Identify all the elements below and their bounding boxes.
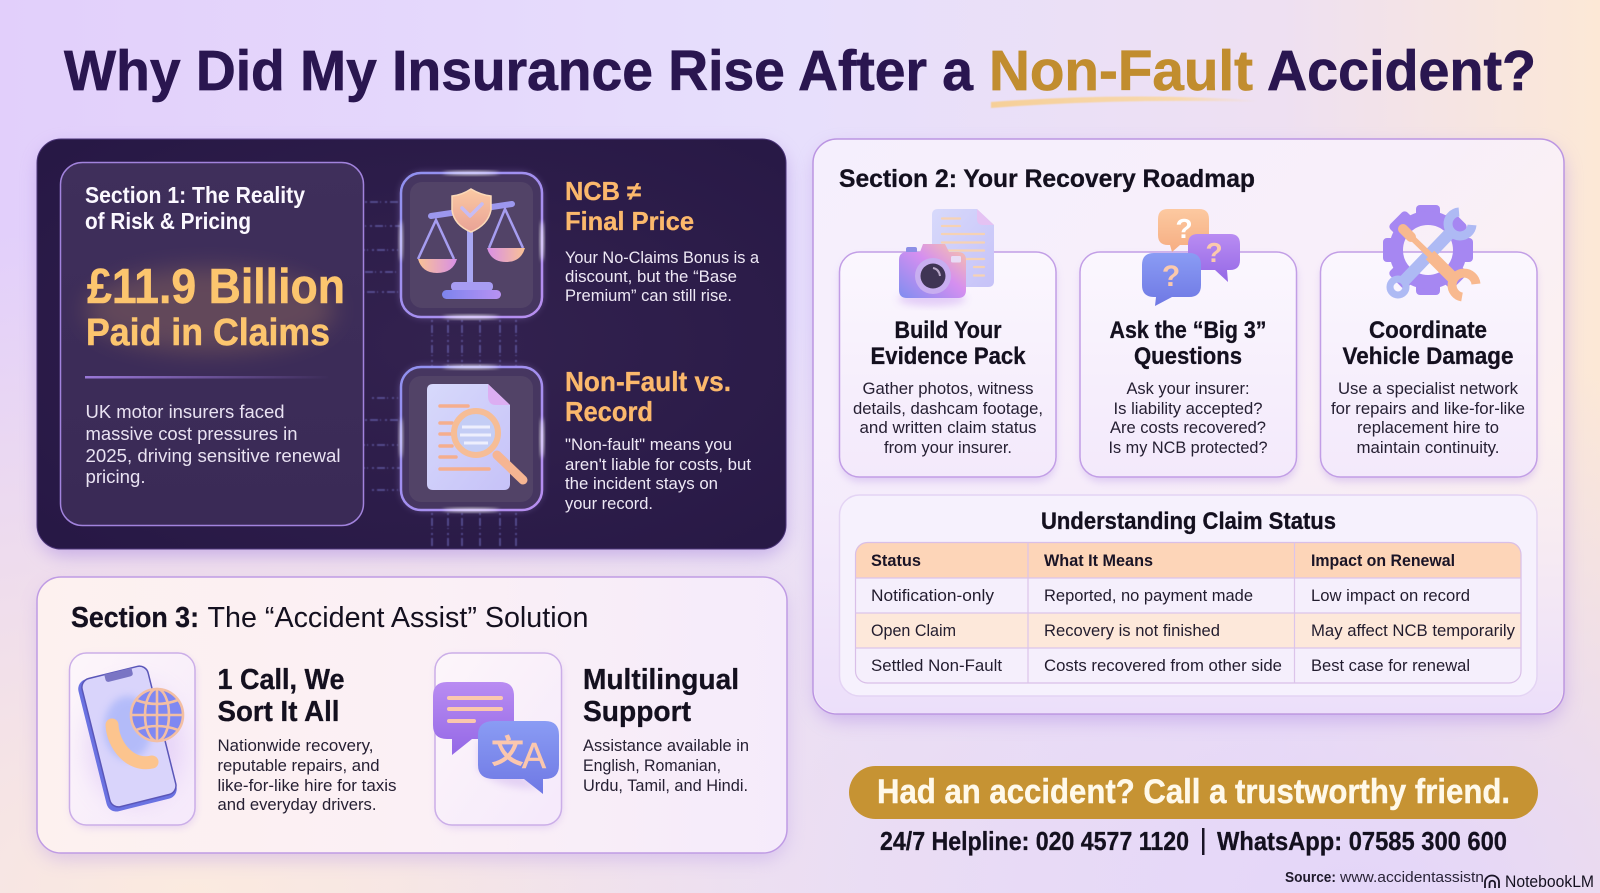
text: one call xyxy=(218,664,396,814)
text: non-fault vs record: Non-Fault vs. xyxy=(565,366,731,397)
text: one call: Nationwide recovery, xyxy=(218,736,374,755)
card text xyxy=(1331,317,1525,457)
row: open claim: Open Claim xyxy=(871,621,956,640)
text: NCB vs final price: Premium” can still rise. xyxy=(565,287,732,305)
table header: Status xyxy=(871,551,921,570)
contact line: 24/7 Helpline: 020 4577 1120 xyxy=(880,826,1189,856)
card text: from your insurer. xyxy=(884,438,1012,457)
data streaks xyxy=(330,202,516,548)
text: NCB vs final price: Your No-Claims Bonus is a xyxy=(565,249,760,267)
row: open claim: Recovery is not finished xyxy=(1044,621,1220,640)
text: multilingual support xyxy=(583,664,749,795)
text: non-fault vs record xyxy=(565,366,751,513)
icon: translation bubbles xyxy=(433,653,562,828)
row: notification-only: Reported, no payment made xyxy=(1044,586,1253,605)
title underline xyxy=(991,96,1258,108)
text: multilingual support: Assistance available in xyxy=(583,736,749,755)
stat description xyxy=(86,401,340,487)
source line xyxy=(1285,869,1484,886)
card text: details, dashcam footage, xyxy=(853,399,1043,418)
stat description: UK motor insurers faced xyxy=(86,401,284,422)
card text: Use a specialist network xyxy=(1338,379,1518,398)
text: one call: Sort It All xyxy=(218,696,340,728)
section 2 heading: Section 2: Your Recovery Roadmap xyxy=(839,165,1255,193)
row: notification-only xyxy=(871,586,1470,605)
card text: Is my NCB protected? xyxy=(1108,438,1268,457)
text: non-fault vs record: the incident stays on xyxy=(565,475,718,493)
card text: for repairs and like-for-like xyxy=(1331,399,1525,418)
row: notification-only: Notification-only xyxy=(871,586,994,605)
step card: evidence pack xyxy=(840,209,1056,482)
title: Accident? xyxy=(1267,39,1536,103)
icon: scales with shield xyxy=(399,171,544,319)
row: notification-only: Low impact on record xyxy=(1311,586,1470,605)
icon: question bubbles: ? xyxy=(1162,260,1180,293)
card text xyxy=(853,317,1043,457)
stat: Paid in Claims xyxy=(86,312,330,354)
text: one call: reputable repairs, and xyxy=(218,756,380,775)
table header xyxy=(871,551,1455,570)
card heading: Section 1: The Reality xyxy=(85,182,305,208)
card text xyxy=(1108,317,1268,457)
step card: vehicle damage xyxy=(1320,205,1537,482)
section 3 heading: Section 3: xyxy=(71,602,199,634)
row: settled non-fault: Costs recovered from other side xyxy=(1044,656,1282,675)
icon: translation bubbles: A xyxy=(522,735,546,776)
text: multilingual support: Multilingual xyxy=(583,664,739,696)
icon: question bubbles: ? xyxy=(1175,213,1193,244)
stat description: pricing. xyxy=(86,466,146,487)
card text: Coordinate xyxy=(1369,317,1487,344)
text: one call: like-for-like hire for taxis xyxy=(218,776,396,795)
card text: Evidence Pack xyxy=(870,343,1026,370)
table header: What It Means xyxy=(1044,551,1153,570)
stat description: massive cost pressures in xyxy=(86,423,298,444)
key stat card xyxy=(60,162,364,526)
text: one call: and everyday drivers. xyxy=(218,795,376,814)
call to action pill: Had an accident? Call a trustworthy friend. xyxy=(877,773,1510,811)
claim status card xyxy=(840,495,1537,696)
panel: section 3 xyxy=(37,577,787,860)
card heading xyxy=(85,182,305,234)
stat: £11.9 Billion xyxy=(87,260,345,314)
contact line xyxy=(880,826,1507,856)
card heading: of Risk & Pricing xyxy=(85,208,251,234)
text: non-fault vs record: "Non-fault" means you xyxy=(565,436,732,454)
icon: phone and globe xyxy=(70,653,196,828)
row: settled non-fault xyxy=(871,656,1470,675)
source line: Source: xyxy=(1285,869,1336,886)
card text: Are costs recovered? xyxy=(1110,418,1266,437)
step card: big 3 questions xyxy=(1080,209,1297,482)
title: Non-Fault xyxy=(989,39,1253,103)
card text: Vehicle Damage xyxy=(1342,343,1514,370)
card text: Ask the “Big 3” xyxy=(1110,317,1266,344)
panel: section 2 xyxy=(813,139,1564,721)
text: NCB vs final price: NCB ≠ xyxy=(565,176,641,206)
card text: Build Your xyxy=(894,317,1002,344)
icon: camera and document xyxy=(898,209,994,306)
text: non-fault vs record: your record. xyxy=(565,495,653,513)
icon: translation bubbles: 文 xyxy=(491,725,524,773)
source line: www.accidentassistn xyxy=(1339,869,1484,886)
stat xyxy=(86,260,345,354)
row: open claim: May affect NCB temporarily xyxy=(1311,621,1515,640)
table heading: Understanding Claim Status xyxy=(1041,508,1336,535)
call to action pill xyxy=(849,766,1538,819)
card text: Is liability accepted? xyxy=(1114,399,1262,418)
card text: maintain continuity. xyxy=(1356,438,1500,457)
stat glow xyxy=(85,268,335,352)
card text: replacement hire to xyxy=(1357,418,1499,437)
text: multilingual support: English, Romanian, xyxy=(583,756,721,775)
text: NCB vs final price: discount, but the “Base xyxy=(565,268,737,286)
stat description: 2025, driving sensitive renewal xyxy=(86,445,340,466)
row: open claim xyxy=(871,621,1515,640)
section 3 heading: The “Accident Assist” Solution xyxy=(208,602,588,634)
card text: Gather photos, witness xyxy=(862,379,1034,398)
NotebookLM watermark: NotebookLM xyxy=(1505,872,1594,891)
icon: gear and tools xyxy=(1383,205,1476,297)
contact line: WhatsApp: 07585 300 600 xyxy=(1217,826,1507,856)
icon: question bubbles xyxy=(1142,209,1240,306)
text: multilingual support: Urdu, Tamil, and Hindi. xyxy=(583,776,748,795)
text: NCB vs final price xyxy=(565,176,760,305)
card text: Questions xyxy=(1134,343,1242,370)
card text: and written claim status xyxy=(860,418,1036,437)
panel: section 1 xyxy=(37,139,786,556)
icon: document and magnifier xyxy=(399,365,544,512)
text: multilingual support: Support xyxy=(583,696,691,728)
row: settled non-fault: Best case for renewal xyxy=(1311,656,1470,675)
table header: Impact on Renewal xyxy=(1311,551,1455,570)
claim status table xyxy=(856,542,1521,683)
text: NCB vs final price: Final Price xyxy=(565,206,694,236)
card text: Ask your insurer: xyxy=(1126,379,1250,398)
row: settled non-fault: Settled Non-Fault xyxy=(871,656,1002,675)
title xyxy=(64,39,1536,108)
text: non-fault vs record: aren't liable for costs, but xyxy=(565,456,751,474)
text: one call: 1 Call, We xyxy=(218,664,344,696)
title: Why Did My Insurance Rise After a xyxy=(64,39,974,103)
text: non-fault vs record: Record xyxy=(565,396,653,427)
icon: question bubbles: ? xyxy=(1205,237,1223,268)
